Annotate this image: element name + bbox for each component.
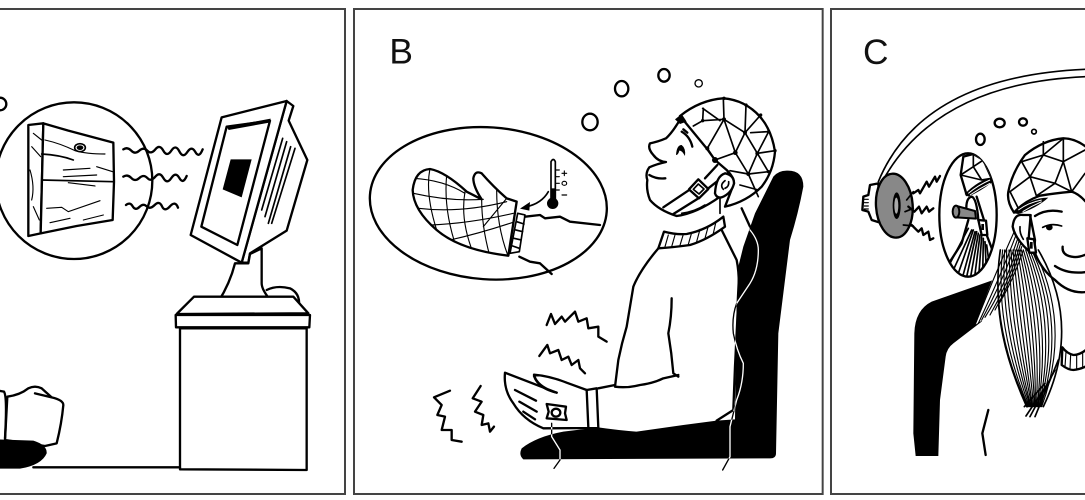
panel letter C: C [863,33,889,72]
speaker [862,172,940,240]
head [647,117,730,216]
wavy signal lines [123,147,203,209]
body and sweater [615,208,750,421]
black chair [520,171,803,459]
monitor stand and cable [218,248,299,309]
sound waves [913,176,940,193]
thought bubble [0,98,6,110]
shoulder line [982,410,988,455]
hand wire [552,423,560,468]
black armrest [0,439,47,469]
arm [519,215,600,274]
ear [715,173,734,213]
EEG cap [675,97,777,207]
panel C: person with headphone [831,9,1085,494]
hand with electrode [505,373,615,428]
desk [176,297,310,470]
headstrap [663,165,727,214]
inset bubble: ear [939,153,997,277]
black chair [913,279,995,456]
panel letter B: B [389,33,413,72]
ear and earpiece [1013,211,1085,292]
thought bubbles [976,118,1036,145]
squiggles: movement [434,312,607,442]
sleeve [0,391,52,438]
fist [5,387,63,446]
imagined wood plank bubble [0,102,152,259]
sweater collar [1062,347,1085,370]
mitt [413,169,517,256]
long hair [975,227,1062,417]
mouth, brow, eye [649,129,692,179]
mitt cuff [510,213,525,253]
collar [658,217,725,248]
arrow [527,192,548,207]
EEG cap [1008,138,1085,217]
thought bubbles [582,69,702,130]
computer monitor [191,101,307,263]
floor line [33,464,180,471]
imagined mitt bubble [368,126,608,281]
thermometer [551,159,555,200]
panel B: person with EEG cap and warm mitt [354,9,823,494]
headband [878,69,1085,183]
face [1029,211,1085,292]
cap wire [723,230,758,470]
panel A: viewing a screen [0,9,345,494]
